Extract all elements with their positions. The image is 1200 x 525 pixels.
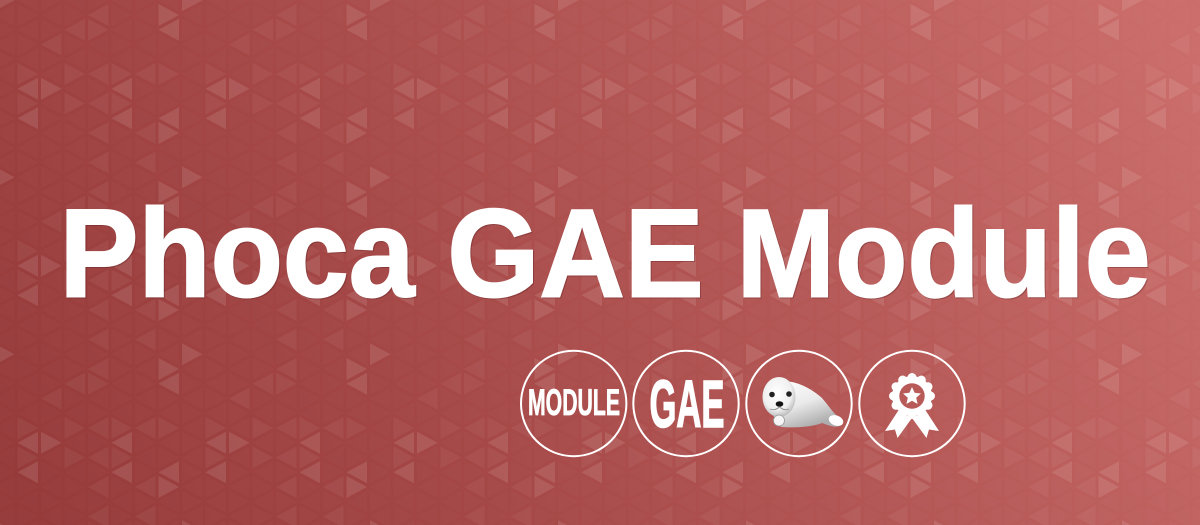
seal flipper bbox=[827, 413, 845, 428]
rosette bbox=[889, 373, 935, 419]
icon: seal circle bbox=[746, 351, 852, 456]
icon: module circle: MODULE bbox=[528, 382, 620, 423]
seal paw bbox=[774, 415, 784, 426]
seal body bbox=[774, 381, 843, 427]
icon: GAE circle bbox=[633, 351, 739, 456]
icon: module circle bbox=[521, 351, 626, 456]
seal head bbox=[762, 377, 796, 417]
seal face bbox=[769, 391, 792, 410]
title: Phoca GAE Module bbox=[60, 184, 1150, 324]
ribbon tails bbox=[885, 411, 939, 438]
icon: award ribbon circle bbox=[859, 351, 965, 456]
star bbox=[903, 387, 921, 404]
icon: GAE circle: GAE bbox=[650, 367, 724, 442]
